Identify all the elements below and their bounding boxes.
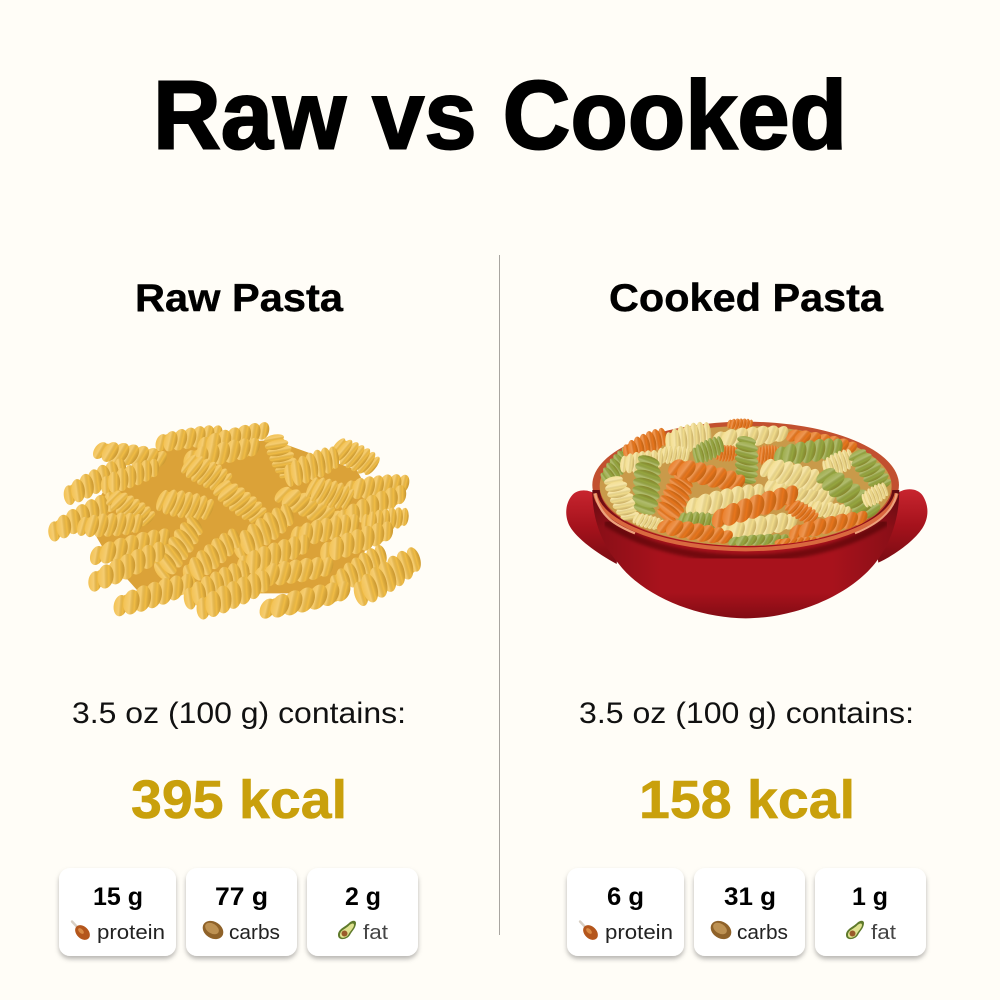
card: protein xyxy=(59,868,176,956)
card: fat: fat xyxy=(871,921,896,944)
card: carbs: 77 g xyxy=(215,883,268,911)
heading: cooked pasta: Cooked Pasta xyxy=(609,277,883,320)
card: fat: 2 g xyxy=(345,883,381,911)
illustration: raw fusilli pile xyxy=(39,417,432,626)
card: protein: 15 g xyxy=(93,883,143,911)
card: carbs: carbs xyxy=(737,921,788,944)
illustration: red bowl of tricolor fusilli xyxy=(566,416,927,618)
calories: 158 kcal xyxy=(639,770,855,830)
panel: cooked pasta xyxy=(566,277,927,956)
heading: raw pasta: Raw Pasta xyxy=(135,277,343,320)
right handle xyxy=(872,489,927,563)
card: fat: fat xyxy=(363,921,388,944)
divider xyxy=(499,255,500,935)
card: protein: 6 g xyxy=(607,883,644,911)
calories: 395 kcal xyxy=(131,770,347,830)
bowl interior xyxy=(592,422,899,548)
card: carbs xyxy=(694,868,805,956)
panel: raw pasta xyxy=(39,277,432,956)
card: carbs: 31 g xyxy=(724,883,776,911)
left handle xyxy=(566,490,622,564)
serving size label: 3.5 oz (100 g) contains: xyxy=(72,697,406,730)
card: protein xyxy=(567,868,684,956)
card: protein: protein xyxy=(97,921,165,944)
bowl body xyxy=(592,490,899,618)
serving size label: 3.5 oz (100 g) contains: xyxy=(579,697,914,730)
card: fat xyxy=(307,868,418,956)
title: Raw vs Cooked xyxy=(153,60,847,170)
card: fat: 1 g xyxy=(852,883,888,911)
card: carbs xyxy=(186,868,297,956)
tricolor pasta xyxy=(594,416,897,549)
card: fat xyxy=(815,868,926,956)
card: protein: protein xyxy=(605,921,673,944)
card: carbs: carbs xyxy=(229,921,280,944)
